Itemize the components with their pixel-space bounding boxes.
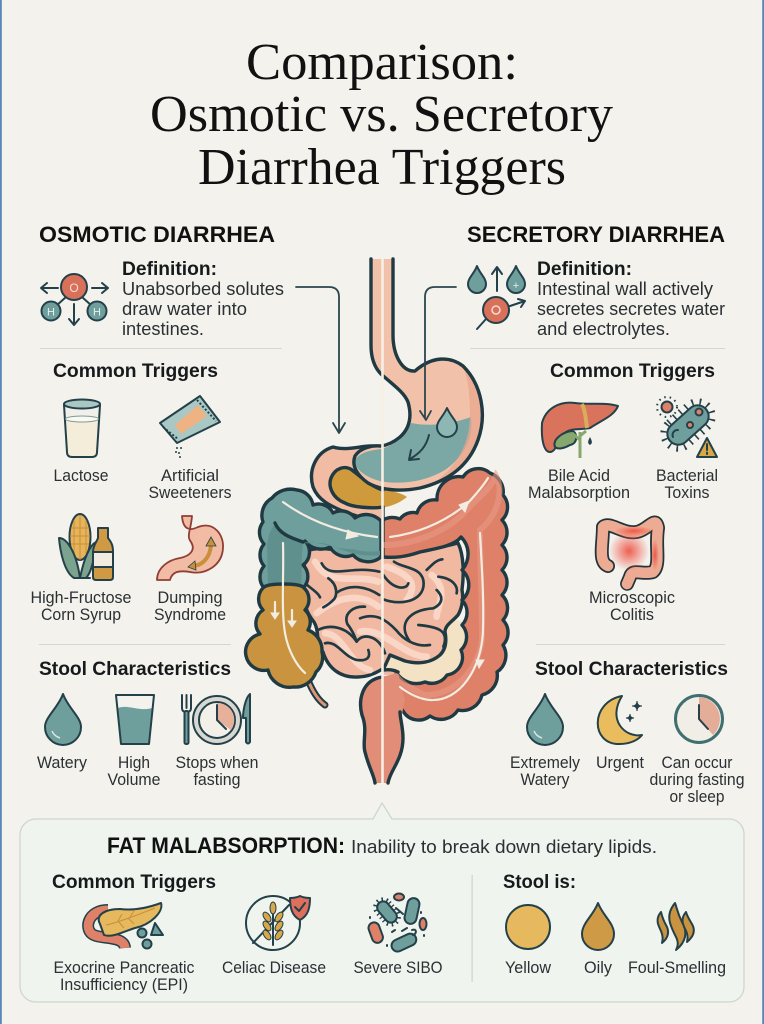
title: Diarrhea Triggers <box>198 139 566 196</box>
definition text: draw water into <box>122 299 247 319</box>
label: high-fructose corn syrup: High-Fructose <box>30 589 132 607</box>
esophagus and stomach <box>354 259 482 490</box>
label: high volume: Volume <box>108 771 160 789</box>
label: stops when fasting <box>176 754 258 789</box>
heading: stool characteristics: Stool Characteristics <box>39 659 231 680</box>
label: bacterial toxins <box>656 467 718 502</box>
label: artificial sweeteners: Artificial <box>161 467 219 485</box>
label: dumping syndrome: Dumping <box>158 589 222 607</box>
appendix <box>308 680 325 705</box>
label: extremely watery: Watery <box>520 771 570 789</box>
title: Comparison: <box>246 34 518 91</box>
definition text <box>122 259 284 339</box>
gallbladder <box>330 469 407 508</box>
label: stops when fasting: fasting <box>194 771 240 789</box>
label: microscopic colitis: Microscopic <box>589 589 675 607</box>
label: high-fructose corn syrup <box>30 589 132 624</box>
label: microscopic colitis <box>589 589 675 624</box>
icon: liver <box>542 403 618 458</box>
flow arrows <box>271 478 488 700</box>
label: oily: Oily <box>584 959 613 977</box>
label: celiac disease: Celiac Disease <box>222 959 326 977</box>
callout arrow: secretory <box>420 287 456 420</box>
label: severe sibo: Severe SIBO <box>354 959 443 977</box>
icon: water drop: Watery <box>37 754 88 772</box>
icon: glass of milk: Lactose <box>54 467 108 485</box>
label: exocrine pancreatic insufficiency <box>54 959 194 994</box>
definition text: intestines. <box>122 319 204 339</box>
label: foul-smelling: Foul-Smelling <box>628 959 726 977</box>
heading: stool is: Stool is: <box>503 872 576 893</box>
definition text <box>537 259 725 339</box>
heading: fat malabsorption: FAT MALABSORPTION: <box>107 833 345 858</box>
icon: corn and syrup bottle <box>59 514 113 580</box>
heading: common triggers: Common Triggers <box>550 361 715 382</box>
label: microscopic colitis: Colitis <box>610 606 654 624</box>
label: exocrine pancreatic insufficiency: Insufficiency (EPI) <box>60 976 188 994</box>
label: artificial sweeteners: Sweeteners <box>148 484 232 502</box>
definition text: Intestinal wall actively <box>537 279 713 299</box>
stomach fluid <box>355 417 471 483</box>
icon: crescent moon: Urgent <box>596 754 644 772</box>
panel: secretory diarrhea <box>467 222 744 806</box>
red colon <box>383 469 508 720</box>
icon: yellow circle <box>506 905 550 949</box>
icon: water molecule: H <box>47 306 55 318</box>
label: extremely watery <box>510 754 581 789</box>
label: extremely watery: Extremely <box>510 754 581 772</box>
icon: secretion droplets and molecule: + <box>513 280 519 292</box>
icon: water drop <box>37 694 88 772</box>
title: Osmotic vs. Secretory <box>150 86 613 143</box>
definition text: and electrolytes. <box>537 319 670 339</box>
label: dumping syndrome <box>154 589 226 624</box>
heading: fat malabsorption: Inability to break down dietary lipids. <box>351 837 657 857</box>
central digestive tract illustration <box>246 259 508 783</box>
icon: dumping syndrome stomach <box>157 516 223 580</box>
icon: high volume cup <box>116 695 154 744</box>
label: bile acid malabsorption: Bile Acid <box>548 467 610 485</box>
panel: fat malabsorption <box>20 803 744 1002</box>
heading: fat malabsorption <box>107 833 657 858</box>
icon: sweetener packet <box>160 396 220 458</box>
stomach droplet <box>437 408 457 437</box>
icon: crescent moon <box>596 696 644 772</box>
label: bile acid malabsorption: Malabsorption <box>528 484 630 502</box>
stomach outline <box>354 259 482 490</box>
icon: secretion droplets and molecule <box>468 266 525 329</box>
label: can occur during fasting or sleep: Can occur <box>662 754 733 772</box>
label: bacterial toxins: Bacterial <box>656 467 718 485</box>
icon: water molecule: H <box>93 306 101 318</box>
heading: common triggers: Common Triggers <box>52 872 216 893</box>
label: can occur during fasting or sleep: or sleep <box>670 788 724 806</box>
label: high volume: High <box>118 754 150 772</box>
duodenum loop <box>312 446 383 525</box>
definition text: Definition: <box>537 259 632 280</box>
definition text: secretes secretes water <box>537 299 725 319</box>
label: bile acid malabsorption <box>528 467 630 502</box>
heading: stool characteristics: Stool Characteristics <box>535 659 728 680</box>
icon: glass of milk <box>54 400 108 485</box>
small intestine <box>303 543 472 690</box>
label: high volume <box>108 754 160 789</box>
icon: plate with clock and cutlery <box>182 694 250 744</box>
label: can occur during fasting or sleep: during fasting <box>650 771 744 789</box>
icon: bacterial toxins <box>657 397 717 457</box>
icon: pancreas <box>88 903 163 948</box>
icon: SIBO bacteria <box>367 894 426 954</box>
heading: secretory diarrhea: SECRETORY DIARRHEA <box>467 222 725 247</box>
heading: common triggers: Common Triggers <box>53 361 218 382</box>
icon: foul smell waves <box>658 903 694 950</box>
icon: water drop <box>527 694 563 745</box>
label: artificial sweeteners <box>148 467 232 502</box>
icon: inflamed colon <box>602 523 659 584</box>
teal colon <box>259 489 381 588</box>
label: exocrine pancreatic insufficiency: Exocrine Pancreatic <box>54 959 194 977</box>
definition text: Definition: <box>122 259 217 280</box>
title <box>150 34 613 196</box>
label: can occur during fasting or sleep <box>650 754 744 806</box>
label: yellow: Yellow <box>505 959 551 977</box>
label: high-fructose corn syrup: Corn Syrup <box>41 606 121 624</box>
label: dumping syndrome: Syndrome <box>154 606 226 624</box>
panel: osmotic diarrhea <box>30 222 284 789</box>
rectum <box>361 673 405 783</box>
stomach arrow <box>409 435 429 460</box>
callout arrow: osmotic <box>296 287 345 433</box>
icon: gluten-free wheat with shield <box>246 896 310 950</box>
label: bacterial toxins: Toxins <box>664 484 710 502</box>
icon: clock <box>676 696 722 742</box>
label: stops when fasting: Stops when <box>176 754 258 772</box>
heading: osmotic diarrhea: OSMOTIC DIARRHEA <box>39 222 275 247</box>
center divider line <box>381 259 384 783</box>
icon: oily drop <box>582 903 614 950</box>
icon: water molecule: O <box>69 281 79 295</box>
callout box with pointer <box>20 803 744 1002</box>
icon: water molecule <box>41 274 108 325</box>
gold ascending colon <box>246 584 323 687</box>
definition text: Unabsorbed solutes <box>122 279 284 299</box>
